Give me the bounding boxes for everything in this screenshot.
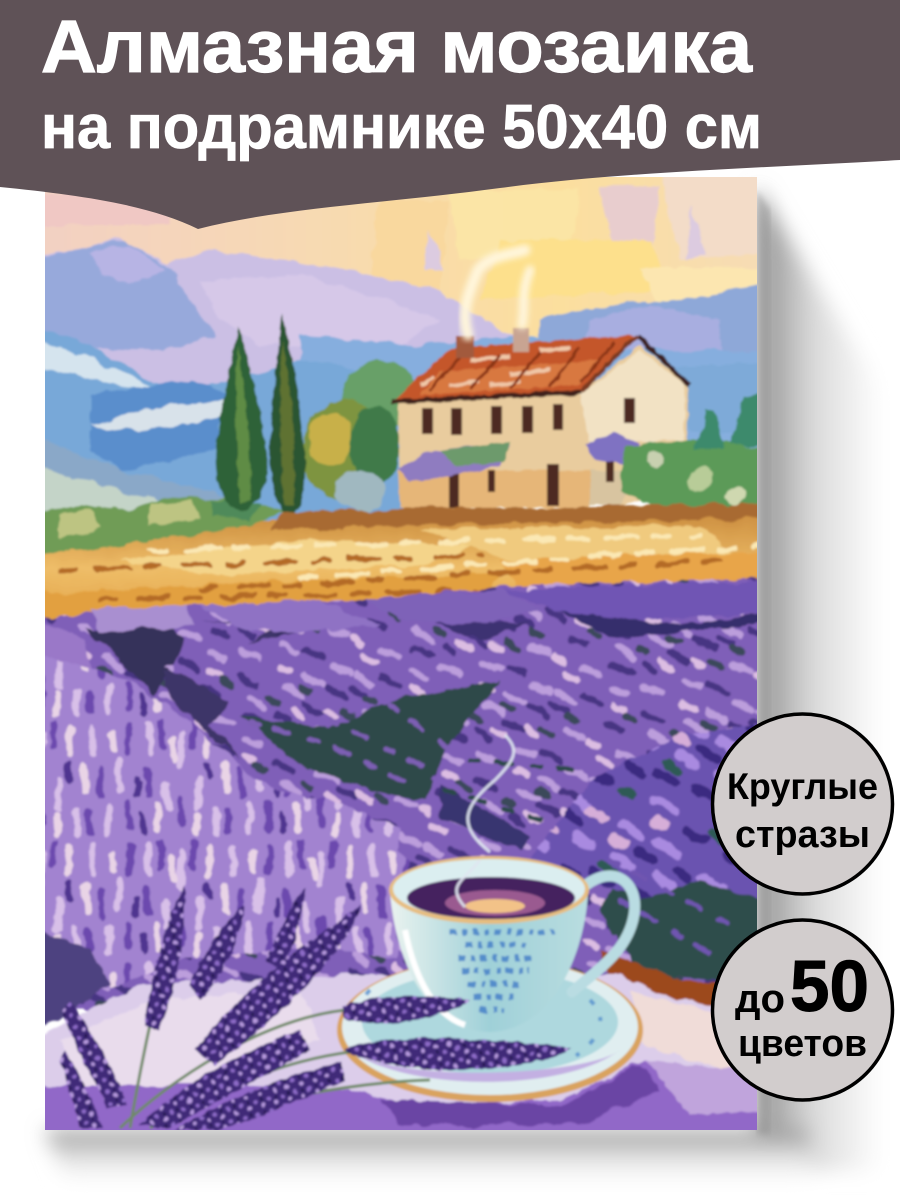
badge: round rhinestones bbox=[712, 714, 892, 894]
cup handle bbox=[572, 876, 635, 992]
title line 1: Алмазная мозаика bbox=[41, 5, 753, 88]
house walls bbox=[398, 345, 688, 508]
right bushes bbox=[270, 385, 790, 530]
badge: up to 50 colours: 50 bbox=[790, 947, 869, 1027]
dark furrows bbox=[85, 610, 790, 1010]
yellow-brown field bbox=[45, 514, 757, 621]
badge: round rhinestones: стразы bbox=[735, 814, 870, 856]
left green bushes bbox=[45, 494, 285, 555]
steam bbox=[457, 735, 514, 907]
far mountains bbox=[45, 236, 757, 450]
wisteria bbox=[398, 432, 640, 482]
lavender rows bbox=[20, 578, 790, 1035]
canvas drop shadow bbox=[40, 170, 882, 1180]
cypress trees bbox=[216, 314, 305, 516]
purple row highlights bbox=[20, 580, 790, 1035]
cup body bbox=[390, 893, 588, 1032]
badge: up to 50 colours: цветов bbox=[738, 1023, 867, 1065]
farmhouse bbox=[392, 250, 690, 508]
painting: lavender field landscape bbox=[45, 177, 757, 1130]
badge: up to 50 colours: до bbox=[735, 977, 785, 1021]
purple strokes over furrows bbox=[250, 705, 740, 960]
tea bbox=[407, 877, 575, 919]
banner shape bbox=[0, 0, 900, 229]
badge: round rhinestones: Круглые bbox=[727, 766, 878, 807]
tea cup and saucer bbox=[337, 735, 643, 1102]
windows and doors bbox=[422, 398, 635, 508]
chimney smoke bbox=[465, 250, 530, 335]
tablecloth bbox=[45, 970, 757, 1130]
lavender base bbox=[20, 578, 790, 1010]
sky bbox=[45, 177, 757, 339]
blue hills bbox=[45, 330, 757, 522]
chimneys bbox=[456, 328, 529, 358]
cup rim bbox=[389, 856, 589, 924]
saucer bbox=[337, 958, 643, 1102]
house roof bbox=[392, 335, 690, 402]
title banner bbox=[0, 0, 900, 229]
lavender sprigs bbox=[60, 885, 572, 1130]
title line 2: на подрамнике 50х40 см bbox=[41, 93, 762, 162]
background tree cluster bbox=[303, 360, 418, 510]
badge: up to 50 colours bbox=[712, 920, 892, 1100]
